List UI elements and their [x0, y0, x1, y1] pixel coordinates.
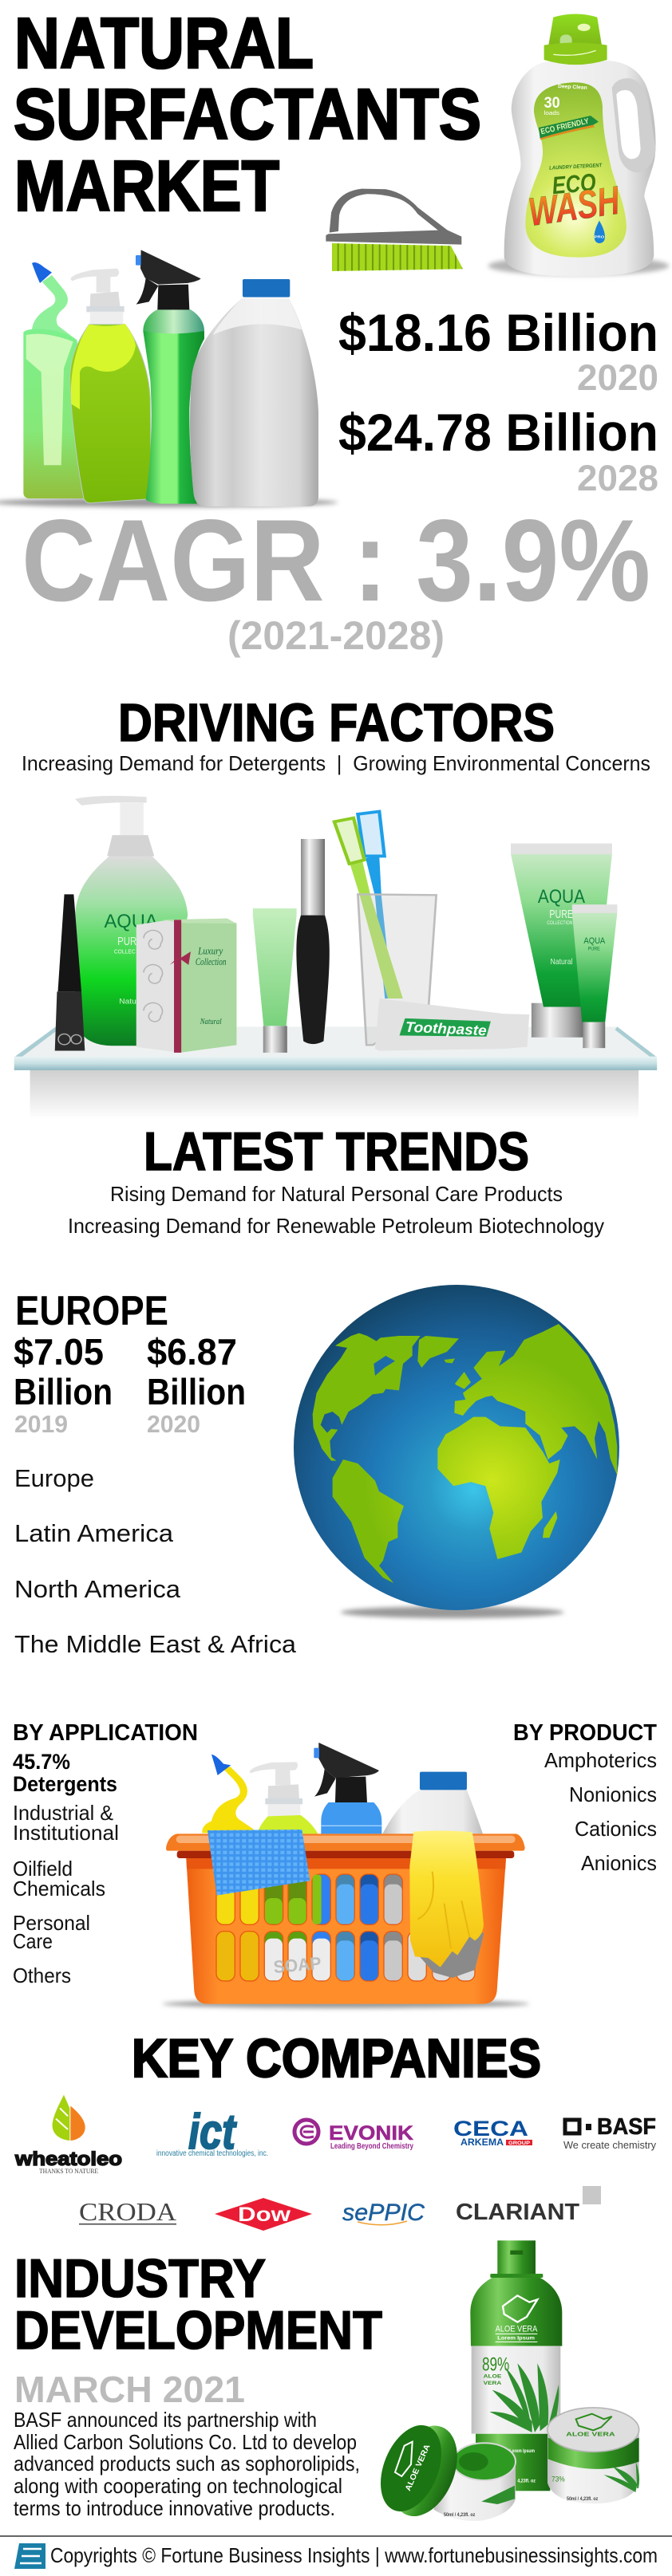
- pump bottle: [70, 269, 151, 503]
- panel: Europe figures: 2019: [14, 1410, 68, 1438]
- panel: by product: [513, 1720, 657, 1875]
- icon: eco wash detergent bottle: ECO: [551, 169, 597, 199]
- regions list: Europe: [14, 1464, 94, 1492]
- panel: by product: Nonionics: [569, 1782, 657, 1806]
- spray bottle: [136, 250, 204, 504]
- aloe bottle: ALOE VERA: [496, 2324, 538, 2334]
- aloe bottle: 4,23fl. oz: [517, 2479, 536, 2484]
- large aqua tube: AQUA: [538, 886, 585, 907]
- panel: by application: 45.7%: [13, 1750, 70, 1774]
- gift box: Collection: [196, 956, 227, 967]
- panel: Europe figures: 2020: [147, 1410, 200, 1438]
- icon: eco wash detergent bottle: 30: [544, 95, 560, 112]
- panel: by product: Anionics: [581, 1851, 657, 1875]
- icon: eco wash detergent bottle: loads: [544, 109, 559, 116]
- blue cloth: [208, 1830, 310, 1896]
- eyeliner: [55, 894, 85, 1051]
- panel: by application: Others: [13, 1964, 71, 1987]
- aloe bottle: Lorem Ipsum: [497, 2336, 535, 2341]
- market value 2028: 2028: [577, 458, 658, 498]
- logo: wheatoleo: [14, 2095, 122, 2175]
- gift box: [136, 918, 236, 1053]
- driving factors text: Increasing Demand for Detergents | Growing Environmental Concerns: [22, 751, 650, 775]
- logo: clariant: [456, 2186, 601, 2225]
- mascara: [296, 839, 330, 1044]
- heading: industry development: INDUSTRY: [14, 2248, 266, 2309]
- CAGR figure: (2021-2028): [227, 613, 445, 658]
- pump bottle: [250, 1762, 318, 1834]
- regions list: North America: [14, 1575, 181, 1603]
- white bottle: [190, 279, 318, 506]
- large aqua tube: COLLECTION: [547, 920, 572, 926]
- title: SURFACTANTS: [14, 75, 481, 155]
- regions list: The Middle East & Africa: [14, 1630, 297, 1658]
- icon: eco wash detergent bottle: Deep Clean: [558, 84, 587, 91]
- regions list: [14, 1464, 297, 1658]
- closed jar: ALOE VERA: [566, 2430, 616, 2437]
- aloe bottle: [470, 2240, 562, 2491]
- heading: industry development: [14, 2248, 382, 2361]
- latest trends text: Increasing Demand for Renewable Petroleum Biotechnology: [68, 1214, 604, 1238]
- heading: key companies: KEY COMPANIES: [132, 2028, 541, 2089]
- panel: Europe figures: Billion: [14, 1371, 113, 1412]
- open jar: [369, 2416, 516, 2526]
- yellow bottle: [202, 1755, 253, 1834]
- logo: dow: [215, 2198, 312, 2231]
- icon: eco wash detergent bottle: WASH: [526, 178, 623, 234]
- pump bottle: AQUA: [104, 911, 158, 932]
- heading: latest trends: LATEST TRENDS: [144, 1121, 529, 1182]
- panel: Europe figures: [14, 1288, 246, 1438]
- market value 2028: [338, 403, 658, 498]
- icon: laundry basket with bottles: [162, 1743, 529, 2008]
- title: MARKET: [14, 147, 279, 226]
- toothbrushes in glass: [334, 811, 437, 1045]
- logo: dow: Dow: [238, 2204, 291, 2226]
- aloe bottle: VERA: [484, 2381, 502, 2386]
- icon: eco wash detergent bottle: PRO: [595, 234, 605, 238]
- closed jar: 73%: [551, 2476, 565, 2483]
- aloe bottle: Lorem Ipsum: [509, 2449, 535, 2454]
- gift box: Luxury: [197, 945, 223, 956]
- footer divider: [0, 2535, 672, 2537]
- panel: by application: Industrial &: [13, 1801, 113, 1825]
- icon: eco wash detergent bottle: ECO FRIENDLY: [540, 117, 590, 136]
- aloe bottle: ALOE: [484, 2374, 502, 2380]
- industry development text: BASF announced its partnership with: [14, 2408, 317, 2432]
- open jar: 50ml / 4,23fl. oz: [444, 2513, 475, 2518]
- panel: Europe figures: $6.87: [147, 1331, 237, 1373]
- industry development text: along with cooperating on technological: [14, 2474, 342, 2498]
- market value 2020: [338, 303, 658, 398]
- panel: by application: [13, 1720, 198, 1987]
- nozzle bottle: [23, 262, 85, 498]
- small green tube: [253, 908, 297, 1053]
- industry development text: terms to introduce innovative products.: [14, 2496, 335, 2520]
- basket: SOAP: [273, 1953, 322, 1977]
- icon: eco wash detergent bottle: [488, 14, 669, 277]
- logo: basf: We create chemistry: [563, 2139, 656, 2151]
- logo: wheatoleo: THANKS TO NATURE: [39, 2168, 98, 2175]
- latest trends text: [68, 1182, 604, 1238]
- icon: globe: [294, 1285, 619, 1618]
- logo: ict: innovative chemical technologies, inc.: [156, 2149, 268, 2158]
- panel: by product: Amphoterics: [544, 1748, 657, 1772]
- small aqua tube: [572, 904, 617, 1048]
- logo: croda: CRODA: [79, 2197, 176, 2226]
- closed jar: [547, 2408, 639, 2503]
- panel: by application: Institutional: [13, 1821, 119, 1845]
- logo: clariant: CLARIANT: [456, 2200, 579, 2225]
- logo: basf: BASF: [597, 2114, 656, 2140]
- date: MARCH 2021: [14, 2369, 245, 2410]
- panel: by application: BY APPLICATION: [13, 1720, 198, 1746]
- large aqua tube: [511, 844, 612, 1038]
- heading: driving factors: DRIVING FACTORS: [118, 693, 555, 753]
- panel: by application: Care: [13, 1929, 53, 1953]
- pump bottle: [75, 796, 188, 1046]
- basket: [166, 1834, 525, 2004]
- open jar: ALOE VERA: [404, 2443, 433, 2492]
- pump bottle: PUR: [117, 935, 136, 948]
- panel: by application: Detergents: [13, 1772, 117, 1796]
- logo: evonik: [294, 2120, 413, 2151]
- panel: by product: BY PRODUCT: [513, 1720, 657, 1746]
- panel: by product: Cationics: [575, 1817, 657, 1841]
- toothpaste tube: [375, 998, 529, 1051]
- small aqua tube: PURE: [588, 947, 600, 952]
- logo: wheatoleo: wheatoleo: [14, 2149, 122, 2170]
- icon: scrubbing brush: [326, 189, 463, 271]
- pump bottle: Natu: [119, 998, 136, 1006]
- logo: ceca arkema: CECA: [453, 2117, 528, 2141]
- title: [14, 4, 481, 226]
- icon: aloe vera products: [369, 2240, 639, 2526]
- logo: ceca arkema: ARKEMA: [461, 2137, 504, 2148]
- logo: seppic: sePPIC: [342, 2200, 425, 2226]
- logo: evonik: Leading Beyond Chemistry: [330, 2142, 413, 2151]
- aloe bottle: 89%: [482, 2354, 509, 2376]
- yellow gloves: [409, 1830, 484, 1978]
- market value 2020: 2020: [577, 357, 658, 398]
- market value 2028: $24.78 Billion: [338, 403, 658, 462]
- panel: by application: Oilfield: [13, 1857, 73, 1881]
- heading: industry development: DEVELOPMENT: [14, 2300, 382, 2361]
- panel: Europe figures: EUROPE: [15, 1288, 168, 1334]
- icon: cleaning bottles group: [0, 250, 338, 507]
- market value 2020: $18.16 Billion: [338, 303, 658, 362]
- spray bottle: [314, 1743, 381, 1834]
- panel: by application: Personal: [13, 1911, 90, 1935]
- gift box: Natural: [200, 1018, 222, 1026]
- panel: by application: Chemicals: [13, 1877, 105, 1900]
- logo: evonik: EVONIK: [329, 2122, 413, 2145]
- large aqua tube: Natural: [551, 957, 572, 967]
- logo: basf: [563, 2114, 656, 2151]
- white bottle: [382, 1772, 483, 1834]
- industry development text: advanced products such as sophorolipids,: [14, 2452, 360, 2476]
- title: NATURAL: [14, 4, 314, 84]
- logo: ict: ict: [188, 2105, 237, 2160]
- pump bottle: COLLEC: [114, 948, 136, 955]
- logo: ict: [156, 2105, 268, 2160]
- footer logo: [14, 2543, 45, 2569]
- toothpaste tube: Toothpaste: [405, 1020, 487, 1039]
- industry development text: [14, 2408, 360, 2520]
- closed jar: 50ml / 4,23fl. oz: [567, 2497, 598, 2502]
- illustration: glass shelf with cosmetics: [14, 796, 657, 1120]
- industry development text: Allied Carbon Solutions Co. Ltd to develop: [14, 2430, 357, 2454]
- latest trends text: Rising Demand for Natural Personal Care Products: [110, 1182, 563, 1206]
- panel: Europe figures: Billion: [147, 1371, 246, 1412]
- small aqua tube: AQUA: [583, 935, 606, 946]
- regions list: Latin America: [14, 1519, 174, 1547]
- logo: ceca arkema: [453, 2117, 532, 2148]
- large aqua tube: PURE: [549, 908, 573, 921]
- logo: ceca arkema: GROUP: [508, 2141, 530, 2146]
- icon: eco wash detergent bottle: LAUNDRY DETERGENT: [549, 163, 603, 171]
- panel: Europe figures: $7.05: [14, 1331, 104, 1373]
